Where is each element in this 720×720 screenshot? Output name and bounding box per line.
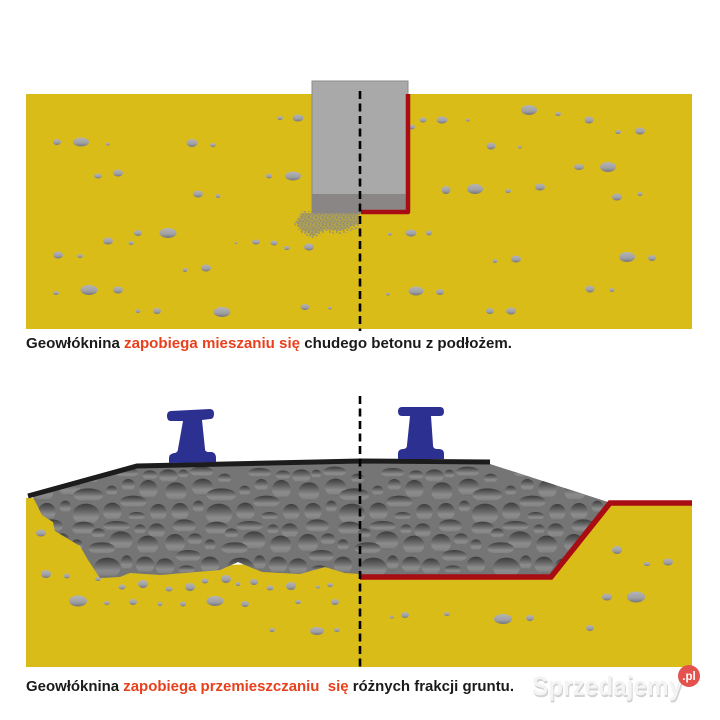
heading: bottom caption: Geowłóknina zapobiega przemieszczaniu się różnych frakcji gruntu. bbox=[26, 679, 514, 695]
watermark: Sprzedajemy bbox=[533, 673, 683, 703]
yellow soil, bottom bbox=[26, 498, 692, 667]
concrete block bbox=[312, 81, 408, 213]
icon: right rail bbox=[398, 407, 444, 459]
sleeper line, black bbox=[28, 461, 490, 496]
watermark: Sprzedajemy bbox=[532, 671, 682, 701]
watermark: .pl bbox=[682, 671, 696, 683]
panel: railway ballast diagram bbox=[0, 407, 692, 667]
heading: top caption: Geowłóknina zapobiega mieszaniu się chudego betonu z podłożem. bbox=[26, 336, 512, 352]
divider: dashed centre line, top bbox=[359, 91, 361, 331]
divider: dashed centre line, bottom bbox=[359, 396, 361, 669]
panel: concrete foundation diagram bbox=[26, 81, 692, 329]
red geotextile, top bbox=[361, 94, 408, 212]
pebbles, bottom soil bbox=[36, 530, 673, 635]
gravel spill under the concrete bbox=[294, 211, 360, 239]
yellow soil, top bbox=[26, 94, 692, 329]
pebbles, top soil bbox=[53, 105, 656, 317]
crushed stone ballast bbox=[33, 464, 608, 578]
red geotextile, bottom bbox=[360, 503, 692, 577]
icon: left rail bbox=[167, 409, 216, 463]
